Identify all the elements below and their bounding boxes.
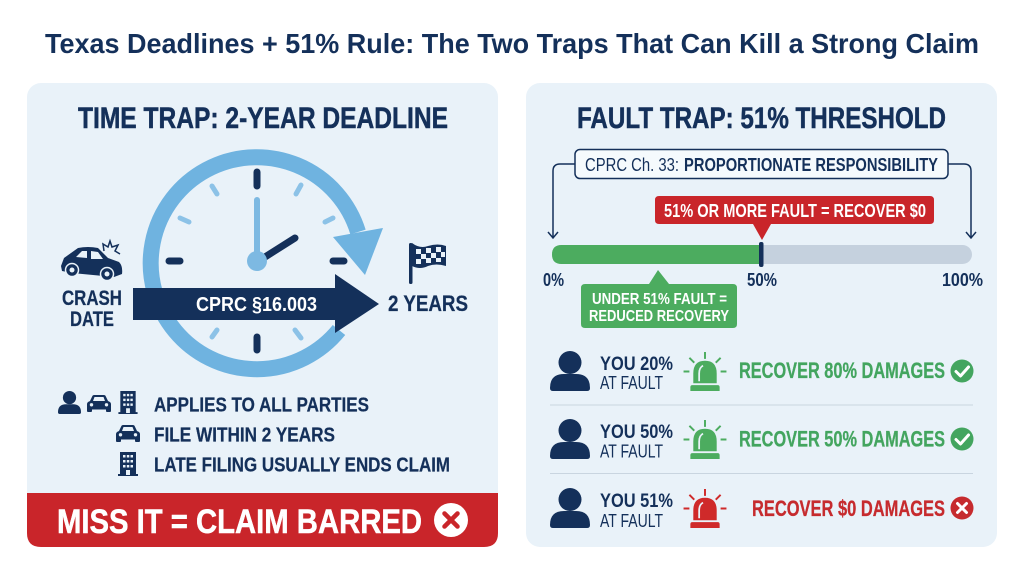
- callout: 51% or more: 51% OR MORE FAULT = RECOVER $0: [664, 201, 926, 221]
- label: crash date: DATE: [70, 308, 114, 331]
- icon: checkered flag: [409, 243, 446, 284]
- circular arrow: [151, 157, 383, 369]
- banner: miss it: [27, 493, 498, 547]
- heading: time trap: TIME TRAP: 2-YEAR DEADLINE: [78, 102, 448, 135]
- row: you 20%: [550, 351, 974, 393]
- icon: green alarm: [684, 420, 726, 459]
- row: you 51%: AT FAULT: [600, 511, 663, 531]
- row: you 50%: AT FAULT: [600, 442, 663, 462]
- icon: red alarm: [684, 489, 726, 528]
- label: 2 years: 2 YEARS: [388, 291, 468, 316]
- arrow: CPRC 16.003: CPRC §16.003: [196, 294, 317, 316]
- icon: green alarm: [684, 352, 726, 391]
- row: you 20%: YOU 20%: [600, 354, 673, 375]
- icon: building: [118, 452, 138, 476]
- label: crash date: CRASH: [62, 287, 122, 310]
- banner: miss it: MISS IT = CLAIM BARRED: [57, 503, 422, 541]
- fault bar: [552, 242, 972, 267]
- icon: check: [950, 360, 974, 382]
- row: you 50%: RECOVER 50% DAMAGES: [739, 426, 945, 452]
- panel: fault trap: [526, 83, 997, 547]
- row: you 51%: [550, 488, 974, 531]
- title: Texas Deadlines + 51% Rule: The Two Traps That Can Kill a Strong Claim: [45, 28, 979, 59]
- icon: check: [950, 428, 974, 450]
- label: crash date: [62, 287, 122, 331]
- heading: fault trap: FAULT TRAP: 51% THRESHOLD: [577, 102, 946, 135]
- clock hands: [247, 200, 295, 271]
- text: late filing: LATE FILING USUALLY ENDS CLAIM: [154, 454, 450, 476]
- axis labels: 50%: [747, 270, 777, 290]
- row: you 51%: YOU 51%: [600, 491, 673, 512]
- text: applies to all parties: APPLIES TO ALL PARTIES: [154, 394, 369, 416]
- icon: x circle: [434, 503, 468, 537]
- axis labels: 0%: [543, 270, 564, 290]
- row: you 50%: YOU 50%: [600, 422, 673, 443]
- statute box: CPRC Ch. 33:: [585, 155, 679, 175]
- icons: person car building: [58, 391, 138, 414]
- statute box: PROPORTIONATE RESPONSIBILITY: [684, 155, 938, 175]
- icon: crashed car: [61, 241, 122, 280]
- callout: under 51%: REDUCED RECOVERY: [589, 308, 729, 325]
- callout: 51% or more: [655, 196, 934, 240]
- arrow: CPRC 16.003: [133, 274, 379, 333]
- clock with circular arrow: [151, 157, 383, 369]
- icon: car: [116, 425, 140, 442]
- text: file within 2 years: FILE WITHIN 2 YEARS: [154, 424, 335, 446]
- callout: under 51%: [581, 270, 737, 328]
- statute box: [575, 150, 948, 178]
- row: you 51%: RECOVER $0 DAMAGES: [752, 496, 945, 521]
- row: you 50%: [550, 419, 974, 462]
- row: you 20%: AT FAULT: [600, 373, 663, 393]
- panel: time trap: [27, 83, 498, 547]
- callout: under 51%: UNDER 51% FAULT =: [592, 291, 727, 308]
- icon: x circle: [950, 496, 974, 520]
- bracket arrows: [548, 164, 976, 238]
- axis labels: 100%: [942, 270, 983, 290]
- row: you 20%: RECOVER 80% DAMAGES: [739, 358, 945, 383]
- axis labels: [543, 270, 983, 290]
